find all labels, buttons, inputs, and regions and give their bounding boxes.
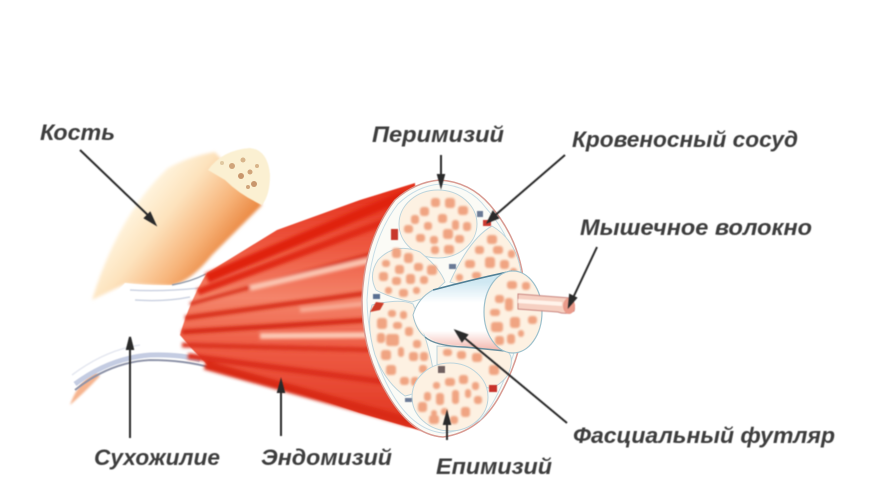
arrow: Епимизий	[444, 413, 450, 440]
muscle belly	[180, 183, 425, 432]
arrows	[80, 150, 597, 440]
label: Мышечное волокно: Мышечное волокно	[580, 215, 812, 240]
fascicle: upper left	[372, 248, 445, 302]
arrow: Эндомизий	[278, 381, 284, 436]
label: Кровеносный сосуд: Кровеносный сосуд	[572, 127, 798, 152]
arrow: Кость	[80, 150, 155, 224]
arrow: Фасциальный футляр	[456, 331, 567, 423]
label: Кость: Кость	[40, 120, 115, 145]
bone cross-section	[208, 148, 270, 205]
fascicle: lower left	[370, 301, 434, 396]
label: Перимизий: Перимизий	[372, 122, 505, 147]
epimysium sheath	[362, 180, 525, 437]
single muscle fibre	[518, 294, 575, 314]
label: Эндомизий: Эндомизий	[261, 445, 393, 470]
arrow: Сухожилие	[127, 337, 133, 438]
fascicle: lower middle	[437, 346, 511, 388]
label: Сухожилие: Сухожилие	[94, 445, 220, 470]
fascicle: bottom	[412, 363, 488, 431]
bone	[70, 148, 270, 405]
label: Фасциальный футляр: Фасциальный футляр	[573, 423, 835, 448]
fascicle: upper right	[450, 226, 521, 288]
inner fascicle face	[484, 271, 542, 353]
muscle cross-section	[362, 180, 575, 437]
labels	[40, 120, 835, 479]
arrow: Мышечное волокно	[569, 247, 597, 306]
blood vessels	[370, 211, 497, 402]
fascial sheath cylinder	[413, 271, 542, 353]
muscle fibre stripes	[182, 195, 410, 422]
arrow: Кровеносный сосуд	[488, 155, 565, 222]
tendon	[70, 272, 215, 390]
arrow: Перимизий	[438, 155, 444, 186]
label: Епимизий: Епимизий	[436, 454, 553, 479]
fascicle: top	[399, 190, 477, 258]
